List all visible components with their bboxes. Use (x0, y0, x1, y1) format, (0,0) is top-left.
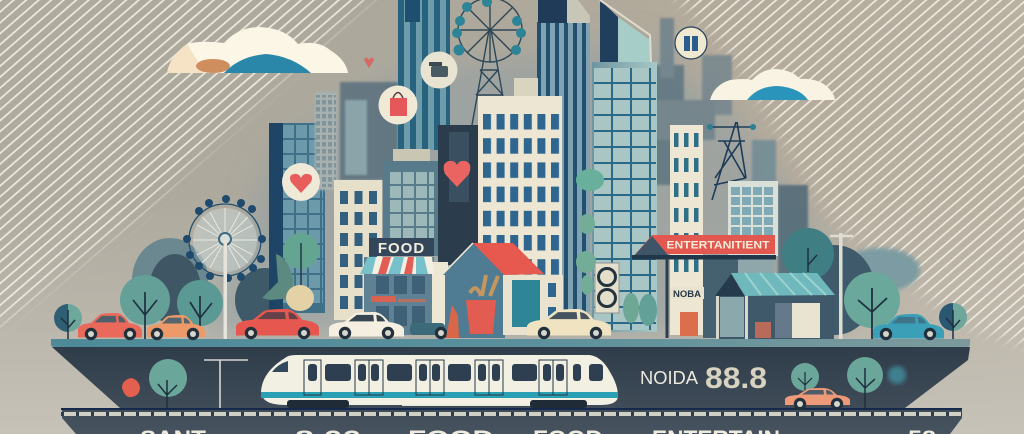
rail track (61, 408, 962, 416)
noida label: NOIDA (640, 368, 698, 388)
trees (54, 169, 967, 339)
left glass block (269, 92, 367, 313)
train (261, 355, 618, 408)
glass tower (592, 0, 657, 332)
small sign (670, 287, 704, 300)
bottom labels (140, 426, 936, 434)
road deck (51, 339, 970, 347)
central haze (200, 40, 850, 335)
icon: car badge (420, 52, 458, 88)
noida label: 88.8 (705, 362, 767, 395)
icon: heart badge (282, 163, 320, 201)
lower trees (149, 357, 906, 408)
apple icon (122, 378, 140, 397)
ferris wheel left (183, 195, 266, 339)
pylon (707, 122, 756, 200)
hazy background towers (340, 18, 808, 275)
lower deck lamp (204, 360, 248, 408)
noida label (640, 362, 767, 395)
hills behind trees (132, 238, 920, 335)
striped awning (360, 257, 434, 274)
food shop (360, 238, 448, 335)
icon: parking badge (675, 27, 707, 59)
figure with package (262, 254, 314, 311)
entertainment sign: ENTERTANITIENT (666, 240, 770, 252)
ferris wheel top (452, 0, 526, 125)
entertainment kiosk (632, 235, 776, 338)
cream building left (334, 180, 382, 320)
cup with pencils (466, 275, 498, 334)
hull (52, 347, 970, 434)
icon: shopping bag (378, 86, 418, 124)
large cream building (478, 78, 562, 306)
right office building (728, 181, 778, 256)
striped tower (537, 0, 590, 312)
teal awning stall (715, 273, 835, 339)
house (442, 243, 563, 338)
cars on deck (78, 309, 944, 340)
icon: heart (444, 161, 470, 187)
speaker (595, 263, 619, 313)
icon: small hazy heart (364, 58, 374, 68)
tower left blue (398, 0, 450, 150)
small sign: NOBA (673, 289, 701, 300)
dark tower (438, 125, 480, 265)
grey-blue building (383, 149, 438, 256)
cream narrow building (670, 125, 703, 335)
street lamp (830, 233, 853, 339)
cloud right (710, 69, 835, 100)
person (446, 305, 459, 338)
lower car (785, 388, 850, 410)
cloud left (167, 27, 348, 73)
food sign: FOOD (378, 240, 425, 257)
